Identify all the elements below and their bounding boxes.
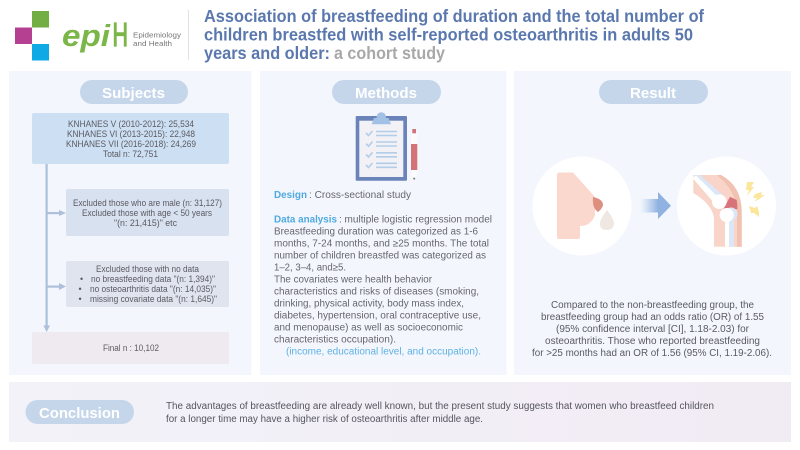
box: survey totals: KNHANES VII (2016-2018): 24,269 (66, 139, 196, 149)
box: survey totals: KNHANES V (2010-2012): 25,534 (68, 119, 194, 129)
box: missing data exclusions: no osteoarthritis data "(n: 14,035)" (90, 284, 216, 294)
arrow (640, 192, 671, 219)
subjects heading (80, 80, 188, 104)
icon: clipboard and pencil (356, 112, 417, 181)
icon: breast with milk drop (532, 156, 632, 256)
box: first exclusions: "(n: 21,415)" etc (114, 218, 178, 228)
header: journal logo (15, 11, 181, 60)
text: conclusion summary: The advantages of breastfeeding are already well known, but the present study suggests that women who breastfeed children (166, 401, 714, 412)
conclusion heading (26, 400, 134, 424)
title: Association of breastfeeding of duration and the total number of (204, 6, 704, 26)
text: data analysis: characteristics and risks of diseases (smoking, (274, 286, 479, 297)
text: result summary: osteoarthritis. Those who reported breastfeeding (545, 336, 760, 347)
box: first exclusions: Excluded those with age < 50 years (82, 208, 213, 218)
text: result summary: Compared to the non-breastfeeding group, the (551, 300, 755, 311)
text: data analysis: and menopause) as well as socioeconomic (274, 322, 463, 333)
title: a cohort study (334, 43, 445, 63)
panel: subjects (9, 71, 252, 375)
icon: painful knee joint (677, 156, 776, 256)
box: first exclusions: Excluded those who are male (n: 31,127) (73, 198, 222, 208)
text: data analysis: months, 7-24 months, and ≥25 months. The total (274, 238, 489, 249)
box: missing data exclusions: • (78, 284, 82, 294)
box: missing data exclusions: • (78, 294, 82, 304)
box: missing data exclusions: • (80, 274, 83, 284)
text: data analysis: : multiple logistic regression model (339, 214, 492, 225)
text: data analysis: 1–2, 3–4, and≥5. (274, 262, 346, 273)
box: missing data exclusions (66, 261, 229, 307)
box: missing data exclusions: no breastfeeding data "(n: 1,394)" (91, 274, 215, 284)
text: result summary: breastfeeding group had an odds ratio (OR) of 1.55 (541, 312, 764, 323)
header: journal logo: and Health (133, 39, 172, 48)
box: survey totals: Total n: 72,751 (103, 149, 158, 159)
box: survey totals (32, 113, 229, 164)
methods heading: Methods (355, 85, 417, 102)
header: journal logo: epi (62, 18, 111, 53)
box: missing data exclusions: Excluded those with no data (96, 264, 199, 274)
text: result summary (532, 300, 772, 359)
header: journal logo: Epidemiology (133, 30, 181, 40)
methods heading (332, 80, 441, 104)
panel: methods (260, 71, 506, 375)
box: first exclusions (66, 189, 229, 236)
panel: conclusion (9, 382, 791, 442)
conclusion heading: Conclusion (39, 405, 120, 422)
box: final sample (32, 332, 229, 364)
title (204, 6, 704, 63)
title: years and older: (204, 43, 330, 63)
text: data analysis: characteristics occupation). (274, 334, 396, 345)
text: result summary: for >25 months had an OR of 1.56 (95% CI, 1.19-2.06). (532, 348, 772, 359)
text: conclusion summary (166, 401, 714, 425)
text: data analysis (274, 214, 492, 357)
result heading: Result (630, 85, 676, 102)
text: data analysis: The covariates were health behavior (274, 274, 433, 285)
box: missing data exclusions: missing covariate data "(n: 1,645)" (90, 294, 217, 304)
header: journal logo: H (112, 16, 128, 53)
text: result summary: (95% confidence interval [CI], 1.18-2.03) for (556, 324, 750, 335)
result heading (599, 80, 708, 104)
box: final sample: Final n : 10,102 (103, 343, 159, 353)
box: survey totals: KNHANES VI (2013-2015): 22,948 (67, 129, 195, 139)
text: design: Design (274, 190, 307, 201)
text: design: : Cross-sectional study (309, 190, 411, 201)
panel: result (514, 71, 791, 375)
subjects heading: Subjects (102, 85, 165, 102)
text: data analysis: drinking, physical activity, body mass index, (274, 298, 464, 309)
text: data analysis: number of children breastfed was categorized as (274, 250, 486, 261)
title: children breastfed with self-reported osteoarthritis in adults 50 (204, 24, 693, 44)
text: data analysis: (income, educational level, and occupation). (286, 346, 481, 357)
flow arrows (43, 164, 66, 332)
text: data analysis: Breastfeeding duration was categorized as 1-6 (274, 226, 479, 237)
text: data analysis: diabetes, hypertension, oral contraceptive use, (274, 310, 481, 321)
text: data analysis: Data analysis (274, 214, 338, 225)
text: conclusion summary: for a longer time may have a higher risk of osteoarthritis after middle age. (166, 414, 483, 425)
